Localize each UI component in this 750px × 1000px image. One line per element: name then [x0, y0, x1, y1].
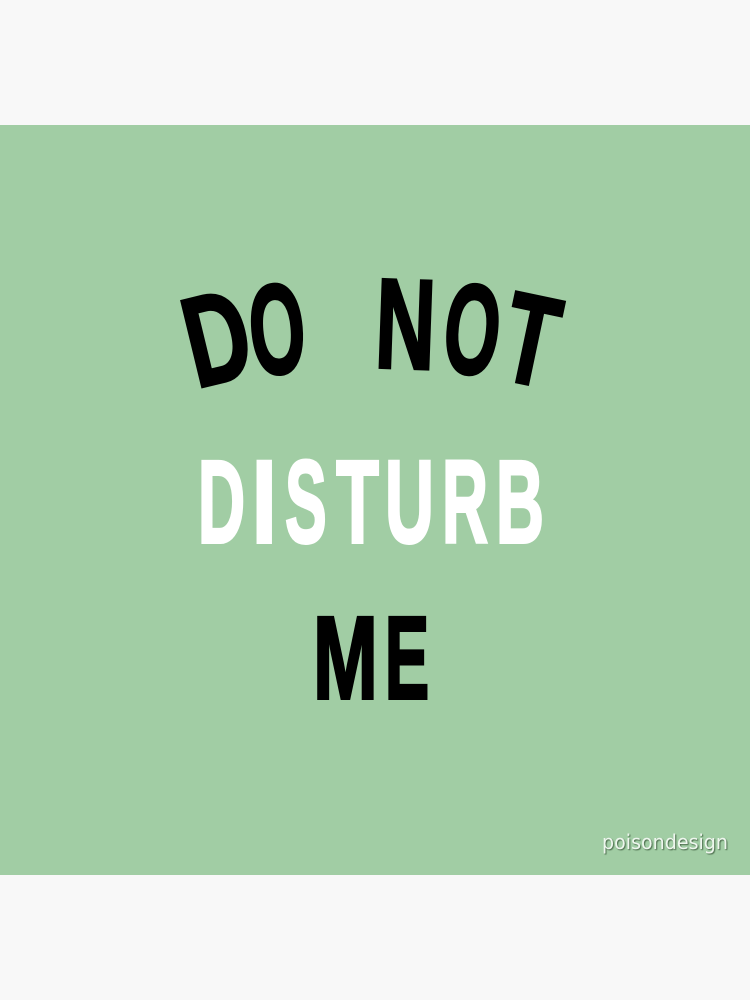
heading line: DISTURB: I	[252, 437, 277, 568]
green panel	[0, 125, 750, 875]
heading line: ME	[313, 592, 429, 724]
heading line: DO NOT: D	[169, 261, 265, 415]
heading line: DISTURB: R	[442, 437, 488, 569]
heading line: DO NOT: T	[491, 266, 571, 416]
heading line: DISTURB: D	[198, 437, 245, 568]
heading line: DISTURB: S	[285, 438, 327, 569]
heading line: ME: E	[385, 593, 429, 724]
watermark: poisondesign: poisondesign	[602, 830, 728, 854]
heading line: DISTURB: U	[385, 437, 434, 568]
heading line: ME: M	[313, 592, 378, 724]
heading line: DO NOT: O	[437, 255, 508, 403]
heading line: DO NOT: O	[243, 255, 311, 403]
heading line: DISTURB: T	[336, 436, 379, 568]
heading line: DISTURB	[198, 436, 544, 569]
heading line: DO NOT: N	[373, 251, 438, 397]
heading line: DO NOT	[169, 251, 571, 416]
heading line: DISTURB: B	[496, 437, 544, 568]
